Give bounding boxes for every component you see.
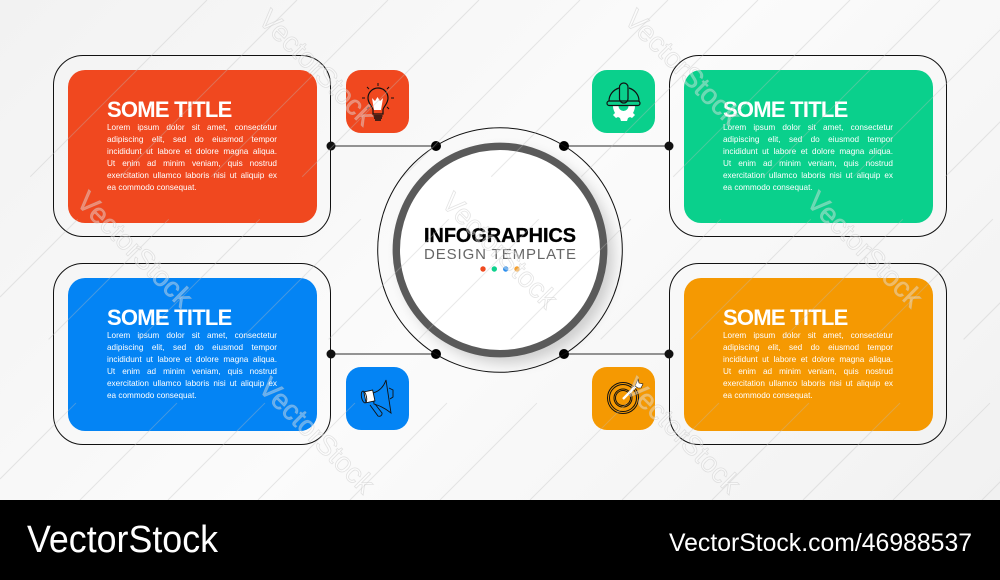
text block xyxy=(723,331,893,400)
text block: incididunt ut labore et dolore magna aliqua. xyxy=(107,147,277,156)
panel: top right xyxy=(669,55,947,237)
text block: adipiscing elit, sed do eiusmod tempor xyxy=(107,135,277,144)
icon: hard hat and gear xyxy=(592,70,655,132)
text block: incididunt ut labore et dolore magna aliqua. xyxy=(107,355,277,364)
text block: Lorem ipsum dolor sit amet, consectetur xyxy=(107,331,277,340)
icon: megaphone xyxy=(346,367,409,430)
heading: SOME TITLE xyxy=(107,304,232,330)
text block: ea commodo consequat. xyxy=(723,183,813,192)
panel: bottom right xyxy=(669,263,947,445)
text block: Lorem ipsum dolor sit amet, consectetur xyxy=(723,331,893,340)
central circle xyxy=(378,128,622,372)
text block: incididunt ut labore et dolore magna aliqua. xyxy=(723,355,893,364)
text block: Ut enim ad minim veniam, quis nostrud xyxy=(723,159,893,168)
connector: bottom left xyxy=(326,349,441,359)
text block xyxy=(107,123,277,192)
text block: incididunt ut labore et dolore magna aliqua. xyxy=(723,147,893,156)
icon: target and arrow xyxy=(592,367,655,430)
VectorStock watermarks: VectorStock xyxy=(801,185,929,314)
footer bar xyxy=(0,500,1000,580)
text block: Ut enim ad minim veniam, quis nostrud xyxy=(107,159,277,168)
text block: ea commodo consequat. xyxy=(107,183,197,192)
text block: Ut enim ad minim veniam, quis nostrud xyxy=(107,367,277,376)
footer image id: VectorStock.com/46988537 xyxy=(669,529,972,557)
text block: exercitation ullamco laboris nisi ut aliquip ex xyxy=(723,171,893,180)
VectorStock watermarks xyxy=(71,3,929,500)
card: blue xyxy=(68,278,317,430)
card: green xyxy=(684,70,933,222)
card: red xyxy=(68,70,317,222)
text block: ea commodo consequat. xyxy=(723,391,813,400)
card: orange xyxy=(684,278,933,430)
text block: exercitation ullamco laboris nisi ut aliquip ex xyxy=(107,379,277,388)
VectorStock watermarks: VectorStock xyxy=(253,3,381,132)
connector: bottom right xyxy=(559,349,674,359)
text block: exercitation ullamco laboris nisi ut aliquip ex xyxy=(723,379,893,388)
heading: SOME TITLE xyxy=(723,304,848,330)
text block: Lorem ipsum dolor sit amet, consectetur xyxy=(723,123,893,132)
text block xyxy=(107,331,277,400)
panel: bottom left xyxy=(53,263,331,445)
icon: light bulb xyxy=(346,70,409,132)
VectorStock watermarks: VectorStock xyxy=(619,3,747,132)
connector: top right xyxy=(559,141,674,151)
connector: top left xyxy=(326,141,441,151)
text block: adipiscing elit, sed do eiusmod tempor xyxy=(107,343,277,352)
footer brand: VectorStock xyxy=(27,519,219,561)
heading: SOME TITLE xyxy=(107,96,232,122)
text block: adipiscing elit, sed do eiusmod tempor xyxy=(723,135,893,144)
colored dots xyxy=(480,266,520,272)
heading: SOME TITLE xyxy=(723,96,848,122)
text block: exercitation ullamco laboris nisi ut aliquip ex xyxy=(107,171,277,180)
central title: INFOGRAPHICS xyxy=(424,225,576,247)
central title: DESIGN TEMPLATE xyxy=(424,246,576,263)
VectorStock watermarks: VectorStock xyxy=(436,186,564,315)
text block: Lorem ipsum dolor sit amet, consectetur xyxy=(107,123,277,132)
text block: Ut enim ad minim veniam, quis nostrud xyxy=(723,367,893,376)
text block: ea commodo consequat. xyxy=(107,391,197,400)
text block xyxy=(723,123,893,192)
central title xyxy=(424,225,576,263)
VectorStock watermarks: VectorStock xyxy=(619,371,747,500)
text block: adipiscing elit, sed do eiusmod tempor xyxy=(723,343,893,352)
VectorStock watermarks: VectorStock xyxy=(71,185,199,314)
panel: top left xyxy=(53,55,331,237)
VectorStock watermarks: VectorStock xyxy=(253,371,381,500)
